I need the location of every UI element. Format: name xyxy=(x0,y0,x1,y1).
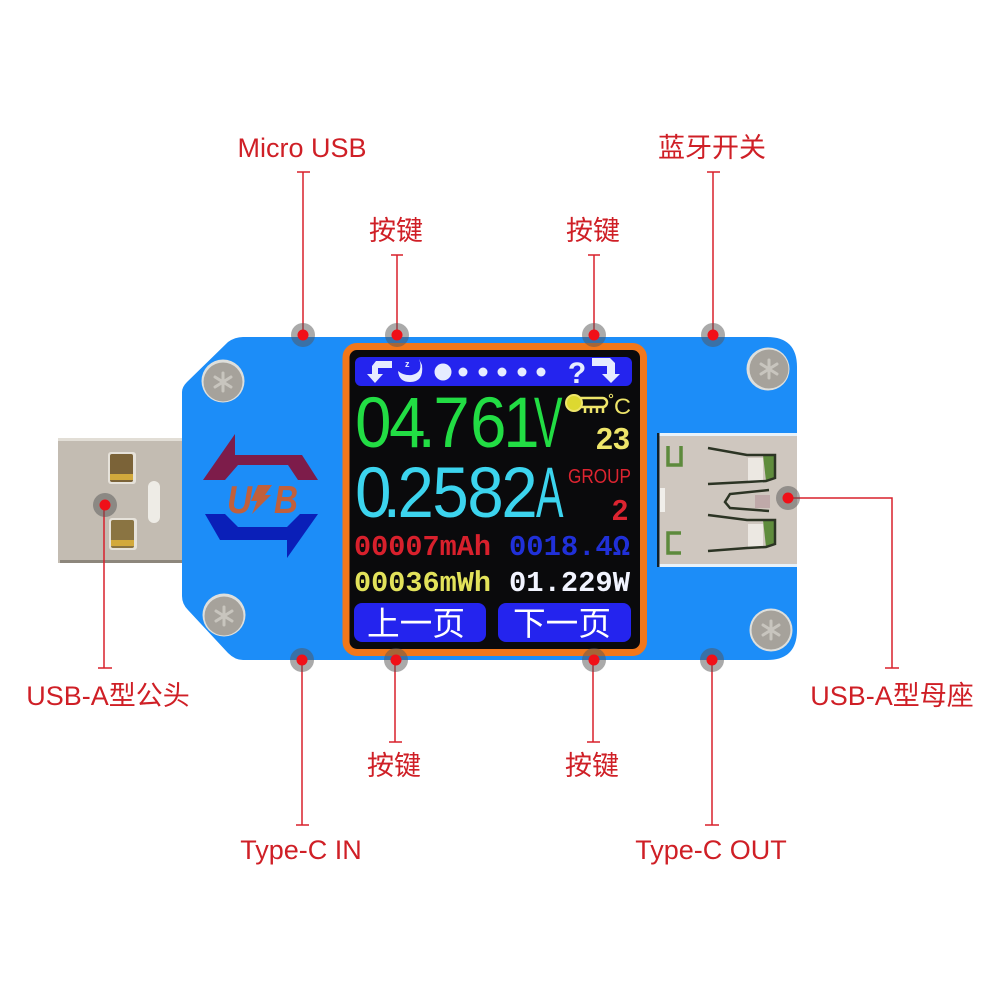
callout: USB-A female xyxy=(776,486,974,711)
callout: Type-C OUT: Type-C OUT xyxy=(635,835,787,865)
callout: Bluetooth switch xyxy=(658,133,766,347)
callout: bottom right button: 按键 xyxy=(565,751,619,781)
current reading: 0.2582 xyxy=(355,454,538,533)
callout: bottom right button xyxy=(565,648,619,781)
voltage reading: 04.761 xyxy=(355,384,540,463)
callout: Micro USB: Micro USB xyxy=(237,133,367,163)
screen top bar: z xyxy=(405,359,410,369)
callout: Bluetooth switch: 蓝牙开关 xyxy=(658,133,766,163)
callout: Type-C IN: Type-C IN xyxy=(240,835,362,865)
temperature icon and value: C xyxy=(614,394,631,419)
screen bezel xyxy=(346,346,644,652)
callout: top left button xyxy=(369,216,423,347)
USB logo xyxy=(203,434,318,558)
next page button: 下一页 xyxy=(513,605,611,642)
temperature icon and value xyxy=(566,394,631,456)
screen top bar xyxy=(355,357,632,390)
USB logo: B xyxy=(274,479,298,522)
callout: Type-C OUT xyxy=(635,648,787,865)
screen top bar: ? xyxy=(568,357,586,390)
callout: bottom left button xyxy=(367,648,421,781)
callout: Micro USB xyxy=(237,133,367,347)
callout: top left button: 按键 xyxy=(369,216,423,246)
current reading: A xyxy=(536,453,564,533)
temperature icon and value: 23 xyxy=(596,421,630,456)
USB logo: U xyxy=(227,479,253,522)
callout: top right button: 按键 xyxy=(566,216,620,246)
group indicator xyxy=(568,466,631,527)
group indicator: GROUP xyxy=(568,466,631,488)
USB-A female socket xyxy=(657,433,797,567)
previous page button: 上一页 xyxy=(367,605,465,642)
USB-A male plug xyxy=(58,438,182,563)
voltage reading: V xyxy=(534,384,562,463)
callout: USB-A male: USB-A型公头 xyxy=(26,681,190,711)
device body xyxy=(182,337,797,660)
callout: USB-A male xyxy=(26,493,190,711)
power reading: 01.229W xyxy=(509,567,631,600)
group indicator: 2 xyxy=(612,495,628,527)
callout: bottom left button: 按键 xyxy=(367,751,421,781)
callout: top right button xyxy=(566,216,620,347)
screws xyxy=(202,348,792,652)
callout: USB-A female: USB-A型母座 xyxy=(810,681,974,711)
charge reading: 00007mAh xyxy=(354,531,491,564)
energy reading: 00036mWh xyxy=(354,567,491,600)
callout: Type-C IN xyxy=(240,648,362,865)
resistance reading: 0018.4Ω xyxy=(509,531,630,564)
